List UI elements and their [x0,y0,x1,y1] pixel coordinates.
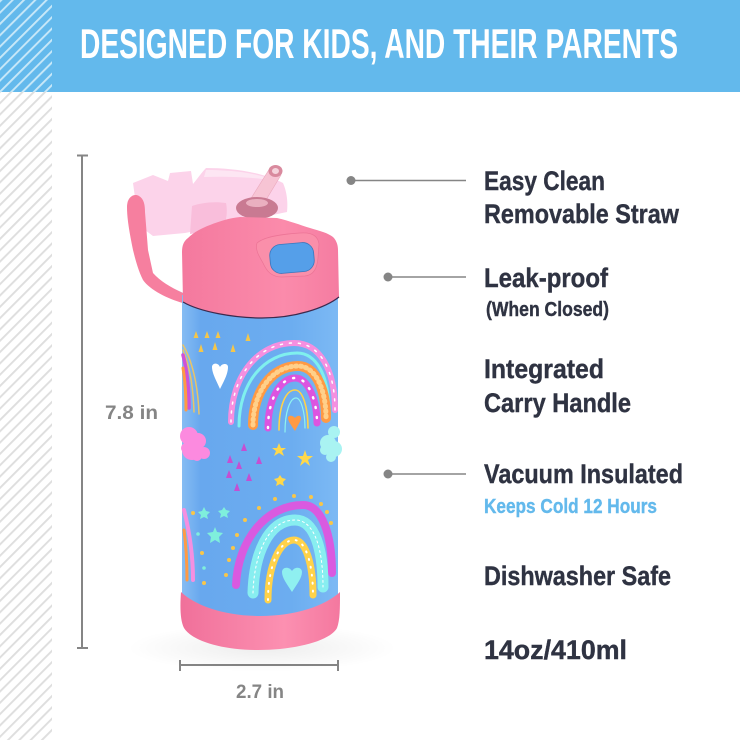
callout: capacity: 14oz/410ml [484,635,627,665]
callout: vacuum insulated: Vacuum Insulated [484,459,683,489]
left lower rainbow [184,510,193,580]
straw [236,165,282,219]
cyan cloud [320,426,342,462]
bottle [127,165,397,672]
pink cloud [180,427,210,461]
bottle body [182,295,338,617]
cap lower edge [183,297,339,318]
left partial rainbow [183,345,199,414]
callout: leak-proof [384,263,609,321]
upper rainbow [231,343,335,432]
translucent flip lid [133,168,287,236]
yellow dots [191,494,333,585]
striped side band: page [0,92,52,740]
yellow stars [272,443,313,486]
header banner [52,0,740,92]
striped side band: header [0,0,52,92]
white heart [212,364,228,389]
callout: easy clean: Easy Clean [484,166,605,196]
cyan stars [196,507,230,570]
lid cap [182,217,339,318]
lid highlight [204,170,276,181]
lower rainbow [236,505,332,600]
callout: vacuum insulated [384,459,683,518]
callout: carry handle: Carry Handle [484,388,631,418]
width label: 2.7 in [236,682,284,703]
callout: vacuum insulated: Keeps Cold 12 Hours [484,496,657,518]
height label: 7.8 in [105,403,158,424]
lid hinge [190,202,227,234]
callout: leak-proof: Leak-proof [484,263,609,293]
callout: leak-proof: (When Closed) [486,299,609,321]
handle blue strip [157,281,183,303]
cyan heart [282,568,302,592]
leader line [388,276,466,278]
leader line [388,473,466,475]
height dimension [77,155,158,648]
callout: easy clean: Removable Straw [484,199,680,229]
callout: carry handle: Integrated [484,354,604,384]
callout: carry handle [484,354,631,418]
orange heart [288,416,301,431]
bottom bumper [180,592,340,650]
callout: easy clean [346,166,680,229]
width dimension [180,660,338,703]
magenta triangles [226,443,262,491]
leader line [351,180,466,182]
carry handle [127,195,183,303]
yellow triangles [194,331,250,352]
callout: dishwasher safe: Dishwasher Safe [484,561,671,591]
flip button [256,233,319,277]
